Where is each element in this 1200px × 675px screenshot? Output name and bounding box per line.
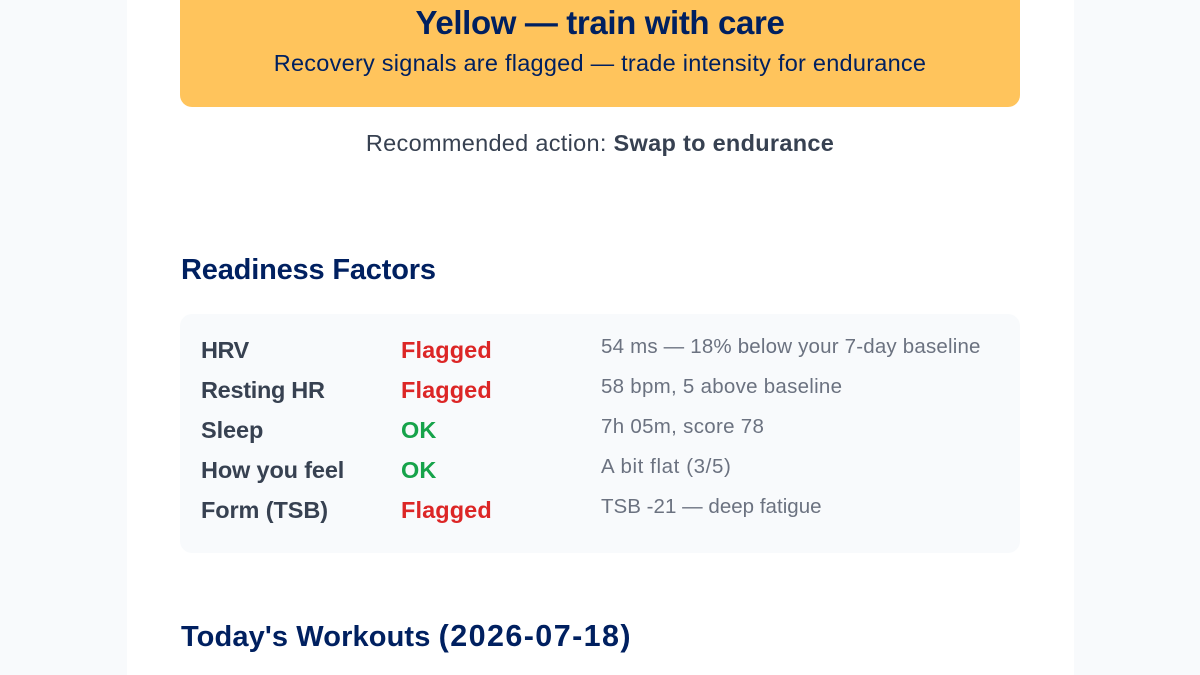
status banner — [180, 0, 1020, 107]
row: sleep — [201, 415, 764, 443]
page card — [127, 0, 1074, 675]
row: HRV — [201, 335, 981, 363]
row: form (TSB) — [201, 495, 822, 523]
row: sleep: Sleep — [201, 417, 263, 443]
row: resting HR: Resting HR — [201, 377, 325, 403]
banner title: Yellow — train with care — [416, 4, 784, 41]
row: form (TSB): Form (TSB) — [201, 497, 328, 523]
row: form (TSB): TSB -21 — deep fatigue — [601, 495, 822, 518]
row: sleep: OK — [401, 417, 436, 443]
heading: readiness factors: Readiness Factors — [181, 254, 436, 286]
heading: today's workouts: Today's Workouts (2026-07-18) — [181, 619, 632, 653]
row: HRV: Flagged — [401, 337, 492, 363]
row: how you feel: A bit flat (3/5) — [601, 455, 731, 478]
row: sleep: 7h 05m, score 78 — [601, 415, 764, 438]
row: how you feel: OK — [401, 457, 436, 483]
panel: readiness factors — [180, 314, 1020, 553]
row: HRV: HRV — [201, 337, 249, 363]
row: resting HR: 58 bpm, 5 above baseline — [601, 375, 842, 398]
banner subtitle: Recovery signals are flagged — trade intensity for endurance — [274, 50, 926, 76]
row: how you feel: How you feel — [201, 457, 344, 483]
recommended action: Recommended action: Swap to endurance — [366, 130, 834, 156]
row: resting HR — [201, 375, 842, 403]
row: resting HR: Flagged — [401, 377, 492, 403]
row: how you feel — [201, 455, 731, 483]
row: HRV: 54 ms — 18% below your 7-day baseline — [601, 335, 981, 358]
row: form (TSB): Flagged — [401, 497, 492, 523]
